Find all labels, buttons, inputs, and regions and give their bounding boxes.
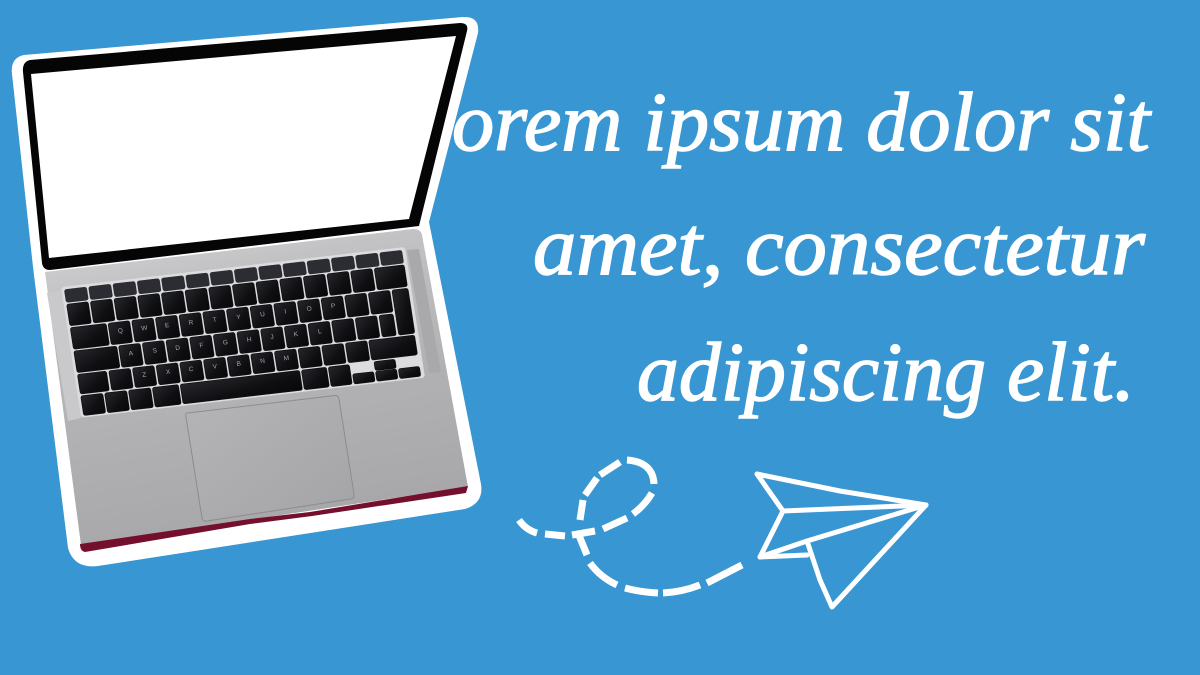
laptop with white sticker outline <box>12 17 481 566</box>
key legends: Q <box>117 328 123 335</box>
key legends: R <box>188 319 194 327</box>
dashed flight path <box>519 460 742 593</box>
headline text: adipiscing elit. <box>637 326 1135 419</box>
key legends: E <box>164 322 171 330</box>
headline text: amet, consectetur <box>533 200 1145 293</box>
key legends: C <box>188 366 194 373</box>
key legends: T <box>212 317 217 324</box>
keyboard <box>61 247 425 418</box>
key legends: A <box>128 350 134 358</box>
speaker grille <box>47 290 81 421</box>
sticker outline <box>12 17 481 566</box>
key legends: Y <box>236 314 242 321</box>
key legends: H <box>246 336 252 344</box>
key legends: B <box>236 360 241 368</box>
key legends: K <box>293 331 299 338</box>
key legends: J <box>270 334 274 341</box>
laptop base <box>45 229 468 552</box>
key legends: P <box>330 303 336 310</box>
key legends: U <box>260 311 266 318</box>
key legends: O <box>306 306 312 313</box>
key legends: G <box>222 339 228 347</box>
key legends: L <box>318 328 323 335</box>
key legends: X <box>166 369 172 376</box>
laptop screen <box>23 23 467 270</box>
headline text <box>404 76 1153 419</box>
main keys <box>67 265 421 415</box>
red bottom edge <box>80 486 468 552</box>
key legends: I <box>284 308 287 316</box>
key legends: Z <box>142 371 147 379</box>
key legends: D <box>175 345 181 352</box>
trackpad <box>186 395 354 521</box>
key legends: F <box>199 342 204 349</box>
function key row <box>64 250 404 302</box>
headline text: Lorem ipsum dolor sit <box>404 76 1153 169</box>
key legends <box>117 303 343 381</box>
key legends: S <box>152 347 158 355</box>
icon: paper plane <box>757 474 926 607</box>
key legends: W <box>141 325 149 332</box>
key legends: M <box>283 355 290 362</box>
key legends: N <box>260 358 266 365</box>
key legends: V <box>212 363 218 371</box>
